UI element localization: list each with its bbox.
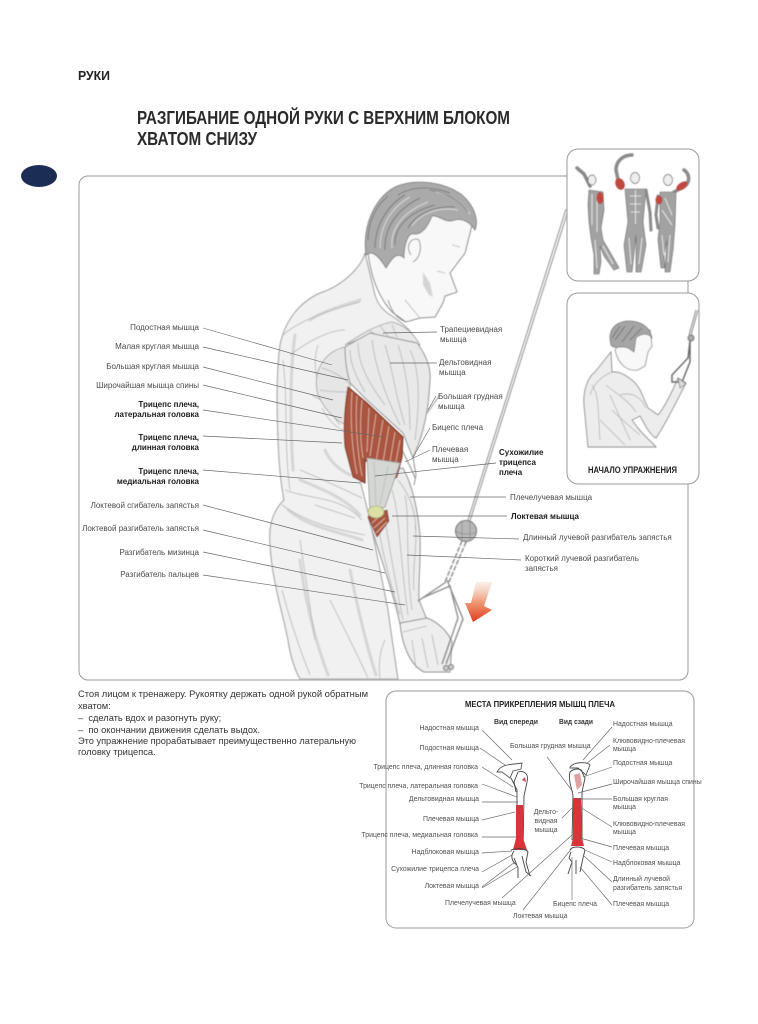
- labels: front view: Локтевая мышца: [513, 913, 568, 920]
- labels: right muscle names: мышца: [432, 455, 459, 464]
- labels: front view: Трицепс плеча, латеральная головка: [359, 783, 478, 790]
- back muscles: [316, 347, 350, 425]
- labels: back view: [510, 721, 702, 908]
- labels: right muscle names: Большая грудная: [438, 392, 503, 401]
- labels: front view: Плечелучевая мышца: [445, 900, 516, 907]
- labels: front view: Бицепс плеча: [553, 901, 597, 908]
- labels: left muscle names: [82, 323, 200, 579]
- labels: left muscle names: Большая круглая мышца: [106, 362, 200, 371]
- icon: three anatomical figures: [577, 155, 689, 274]
- panel: muscle attachment points: [359, 691, 702, 928]
- labels: front view: Трицепс плеча, медиальная головка: [361, 832, 478, 839]
- title: РАЗГИБАНИЕ ОДНОЙ РУКИ С ВЕРХНИМ БЛОКОМ: [137, 107, 510, 128]
- triceps: [344, 387, 403, 483]
- labels: right muscle names: трицепса: [499, 458, 536, 467]
- labels: back view: мышца: [613, 746, 636, 753]
- cable machine: rope, ball, chain and handle: [418, 209, 568, 670]
- leader lines: left: [203, 328, 405, 605]
- labels: left muscle names: Подостная мышца: [130, 323, 200, 332]
- labels: front view: Дельтовидная мышца: [409, 796, 479, 803]
- labels: front view: Локтевая мышца: [425, 883, 479, 890]
- view captions: Вид спереди: [494, 717, 538, 726]
- labels: front view: Сухожилие трицепса плеча: [391, 866, 479, 873]
- labels: front view: Подостная мышца: [420, 745, 479, 752]
- labels: back view: Широчайшая мышца спины: [613, 778, 702, 786]
- right figure: [656, 170, 689, 272]
- labels: right muscle names: мышца: [440, 335, 467, 344]
- illustration: front view humerus: [497, 763, 531, 878]
- labels: left muscle names: Локтевой сгибатель запястья: [91, 501, 199, 510]
- labels: right muscle names: Длинный лучевой разгибатель запястья: [523, 533, 672, 542]
- labels: back view: разгибатель запястья: [613, 884, 682, 892]
- labels: back view: мышца: [534, 827, 558, 834]
- labels: back view: Надостная мышца: [613, 721, 673, 728]
- text block: instructions: Это упражнение прорабатывает преимущественно латеральную: [78, 736, 356, 746]
- panel heading: МЕСТА ПРИКРЕПЛЕНИЯ МЫШЦ ПЛЕЧА: [465, 699, 615, 709]
- labels: back view: мышца: [613, 829, 636, 836]
- labels: back view: Дельто-: [534, 809, 558, 816]
- leader lines: right: [375, 332, 521, 560]
- labels: back view: Большая круглая: [613, 796, 668, 803]
- text block: instructions: хватом:: [78, 701, 111, 711]
- labels: back view: Подостная мышца: [613, 760, 673, 767]
- labels: back view: Длинный лучевой: [613, 875, 670, 883]
- title: [137, 107, 510, 149]
- labels: left muscle names: Широчайшая мышца спины: [96, 381, 199, 390]
- labels: back view: мышца: [613, 804, 636, 811]
- section heading: РУКИ: [78, 69, 110, 83]
- labels: right muscle names: мышца: [439, 368, 466, 377]
- labels: right muscle names: Локтевая мышца: [511, 512, 579, 521]
- labels: back view: Клювовидно-плечевая: [613, 821, 685, 828]
- left figure: [577, 168, 619, 274]
- labels: front view: Плечевая мышца: [423, 816, 479, 823]
- text block: instructions: головку трицепса.: [78, 747, 156, 757]
- hair: [365, 182, 476, 268]
- soft shading on the back and waist: [288, 300, 376, 675]
- view captions: Вид сзади: [559, 717, 593, 726]
- arrow: direction of pull: [465, 582, 492, 622]
- text block: instructions: – по окончании движения сделать выдох.: [78, 725, 260, 735]
- illustration: athlete figure: [270, 182, 476, 679]
- torso and leg: [270, 253, 417, 679]
- leader lines: attachment diagram: [480, 727, 612, 910]
- forearm: [368, 468, 427, 624]
- labels: right muscle names: [432, 325, 672, 573]
- labels: front view: Надостная мышца: [419, 725, 479, 732]
- labels: back view: Клювовидно-плечевая: [613, 738, 685, 745]
- labels: left muscle names: Трицепс плеча,: [138, 467, 199, 476]
- labels: back view: видная: [535, 818, 558, 825]
- labels: right muscle names: Бицепс плеча: [432, 423, 484, 432]
- panel: main illustration: [79, 176, 688, 680]
- labels: right muscle names: Короткий лучевой разгибатель: [525, 554, 639, 563]
- labels: left muscle names: Локтевой разгибатель запястья: [82, 524, 199, 533]
- labels: front view: [359, 725, 597, 920]
- labels: right muscle names: мышца: [438, 402, 465, 411]
- triceps tendon: [367, 458, 400, 511]
- caption: НАЧАЛО УПРАЖНЕНИЯ: [588, 465, 677, 475]
- labels: right muscle names: запястья: [525, 564, 558, 573]
- text block: instructions: [78, 689, 368, 757]
- title: ХВАТОМ СНИЗУ: [137, 129, 258, 149]
- text block: instructions: Стоя лицом к тренажеру. Рукоятку держать одной рукой обратным: [78, 689, 368, 699]
- illustration: back view humerus: [568, 763, 590, 874]
- back shading: [282, 302, 385, 678]
- labels: front view: Надблоковая мышца: [412, 848, 479, 856]
- labels: left muscle names: длинная головка: [132, 443, 200, 452]
- labels: back view: Плечевая мышца: [613, 901, 669, 908]
- centre figure: [613, 155, 651, 272]
- labels: back view: Надблоковая мышца: [613, 859, 681, 867]
- labels: front view: Трицепс плеча, длинная головка: [373, 764, 478, 771]
- hand: [400, 618, 452, 672]
- labels: back view: Большая грудная мышца: [510, 743, 591, 750]
- labels: right muscle names: Сухожилие: [499, 448, 544, 457]
- labels: right muscle names: плеча: [499, 468, 523, 477]
- panel: starting position: [567, 293, 699, 484]
- labels: left muscle names: Малая круглая мышца: [115, 342, 200, 351]
- labels: left muscle names: Разгибатель мизинца: [119, 548, 200, 557]
- labels: right muscle names: Дельтовидная: [439, 358, 491, 367]
- labels: left muscle names: латеральная головка: [114, 410, 200, 419]
- labels: left muscle names: медиальная головка: [117, 477, 200, 486]
- labels: back view: Плечевая мышца: [613, 845, 669, 852]
- labels: right muscle names: Плечевая: [432, 445, 468, 454]
- panel: muscles involved: [567, 149, 699, 281]
- labels: right muscle names: Плечелучевая мышца: [510, 493, 593, 502]
- labels: left muscle names: Трицепс плеча,: [138, 400, 199, 409]
- deltoid and upper arm: [345, 333, 430, 458]
- head: [367, 200, 472, 322]
- trapezius: [345, 322, 420, 345]
- illustration: starting pose: [584, 310, 698, 447]
- labels: left muscle names: Трицепс плеча,: [138, 433, 199, 442]
- icon: navy oval tab: [21, 165, 57, 187]
- anconeus: [368, 510, 389, 537]
- view captions: [494, 717, 593, 726]
- labels: left muscle names: Разгибатель пальцев: [120, 570, 199, 579]
- labels: right muscle names: Трапециевидная: [440, 325, 502, 334]
- text block: instructions: – сделать вдох и разогнуть руку;: [78, 713, 221, 723]
